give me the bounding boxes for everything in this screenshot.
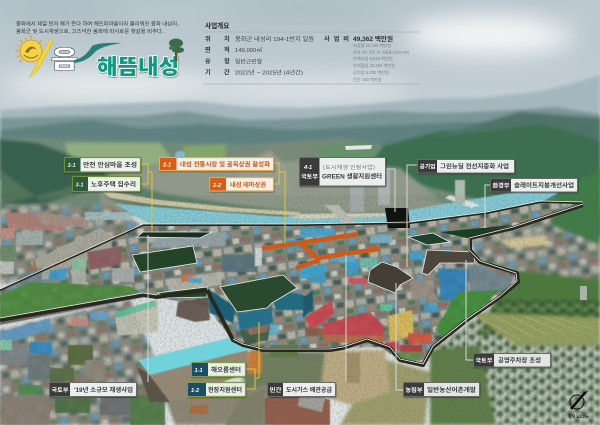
farmland rows xyxy=(480,316,595,340)
callout: 4-1 green centre: GREEN 생활지원센터 xyxy=(322,172,382,180)
callout: gas supply: 도시가스 배관공급 xyxy=(286,386,332,394)
callout: 2-1 market xyxy=(160,158,274,170)
icon: north arrow and scale xyxy=(568,391,590,419)
callout: 4-1 green centre: (도시재생 인정사업) xyxy=(323,164,375,171)
project area details: forest plots and dark buildings xyxy=(132,208,513,312)
project overview table: 위 xyxy=(205,35,211,43)
callout: 4-1 green centre xyxy=(300,158,386,186)
project overview table: 기 xyxy=(205,68,211,76)
project overview table: 사 업 비 xyxy=(324,35,349,43)
icon: teal swoosh xyxy=(74,43,122,63)
callout: 2-1 market: 2-1 xyxy=(162,162,171,168)
callout: gas supply xyxy=(268,382,336,396)
callout: slate removal: 슬레이트지붕개선사업 xyxy=(514,182,574,190)
project overview table: 간 xyxy=(224,68,230,76)
callout: 1-2 centre xyxy=(188,382,246,396)
callout: 3-1 safe village: 3-1 xyxy=(68,163,76,169)
intro text: 봉화에서 제일 먼저 해가 뜬다 하여 해뜨피마을이라 불리워진 봉화 내성리.. xyxy=(16,20,180,28)
callout: 3-1 safe village xyxy=(64,158,140,172)
logo xyxy=(15,35,184,79)
intro text xyxy=(16,20,180,35)
callout: slate removal xyxy=(490,178,578,192)
callout: 1-2 centre: 현장지원센터 xyxy=(208,386,242,394)
callout: 1-1 centre: 1-1 xyxy=(194,368,203,374)
callout: 3-1 housing repair: 3-1 xyxy=(76,182,84,188)
logo wordmark: 음: 음 xyxy=(51,46,78,74)
town belt beyond river xyxy=(0,150,600,285)
right town and hills xyxy=(0,170,600,425)
project overview table: 봉화군 내성리 194-1번지 일원 xyxy=(235,35,314,43)
intro text: 봉화군 및 도시재생으로, 고즈넉한 봉화에 따사로운 햇살을 비추다.. xyxy=(16,27,165,35)
logo wordmark: 해뜸내성: 해뜸내성 xyxy=(97,56,179,79)
callout: 1-1 centre: 해오름센터 xyxy=(211,366,241,374)
callout: KEPCO undergrounding xyxy=(418,160,514,173)
project overview table: 49,362 백만원 xyxy=(353,34,393,43)
callout: 2-2 theme xyxy=(210,178,274,191)
callout: 1-2 centre: 1-2 xyxy=(191,388,200,394)
callouts xyxy=(50,158,578,396)
project overview table: 연계사업 6,515 백만원 xyxy=(353,55,393,62)
callout: public parking: 국토부 xyxy=(476,358,492,364)
project overview table: 마중물 14,160 백만원 xyxy=(353,42,391,49)
callout: rural development: 농림부 xyxy=(406,386,422,394)
leader lines xyxy=(141,163,490,390)
heading: 사업개요 xyxy=(205,21,229,30)
project overview table: 면 xyxy=(205,46,211,54)
icon: sun xyxy=(15,35,53,78)
project overview table: 적 xyxy=(224,46,230,54)
callout: 2-2 theme: 2-2 xyxy=(212,183,222,189)
photo grain xyxy=(0,195,600,425)
callout: KEPCO undergrounding: 공기업 xyxy=(420,162,436,170)
project overview table xyxy=(203,21,420,84)
callout: public parking: 공영주차장 조성 xyxy=(498,356,541,364)
project overview table: 149,000㎡ xyxy=(235,46,262,54)
large landmark buildings xyxy=(137,288,313,402)
callout: 3-1 housing repair: 노후주택 집수리 xyxy=(91,180,136,188)
project overview table: 유 xyxy=(205,58,211,66)
callout: small regeneration: 국토부 xyxy=(52,387,68,394)
callout: 4-1 green centre: 국토부 xyxy=(301,174,318,180)
icon: pine tree xyxy=(169,38,184,61)
callout: 2-2 theme: 내성 테마상권 xyxy=(230,181,266,189)
river xyxy=(100,162,560,226)
callout: rural development xyxy=(404,382,480,396)
project overview table: 일반근린형 xyxy=(235,58,262,66)
callout: small regeneration: '19년 소규모 재생사업 xyxy=(74,386,133,394)
project overview table: 치 xyxy=(224,35,230,43)
callout: public parking xyxy=(474,354,550,367)
callout: slate removal: 환경부 xyxy=(492,182,510,190)
callout: rural development: 일반농산어촌개발 xyxy=(427,386,477,394)
inside district base xyxy=(0,202,583,365)
callout: 2-1 market: 내성 전통시장 및 골목상권 활성화 xyxy=(180,160,271,168)
project overview table: 공기업 6,200 백만원 xyxy=(353,69,389,76)
project overview table: 2022년 ~ 2025년 (4년간) xyxy=(235,68,303,76)
callout: 4-1 green centre: 4-1 xyxy=(303,165,312,171)
callout: 1-1 centre xyxy=(192,362,246,376)
callout: gas supply: 민간 xyxy=(270,386,282,394)
callout: 3-1 housing repair xyxy=(72,176,140,192)
project overview table: 민간 193 백만원 xyxy=(353,76,382,83)
icon: north arrow and scale: 축척 1/2,700 xyxy=(568,413,590,419)
project overview table: 부처협업 22,294 백만원 xyxy=(353,62,395,69)
orange market street highlight xyxy=(262,234,379,268)
callout: KEPCO undergrounding: 그린뉴딜 전선지중화 사업 xyxy=(440,162,509,170)
callout: 3-1 safe village: 안전 안심마을 조성 xyxy=(83,161,137,169)
buildings and roofs xyxy=(0,212,514,425)
project overview table: (지방 100, 민간 34, 마중물사업비 400) xyxy=(353,50,409,54)
project overview table: 형 xyxy=(224,58,230,66)
boundary road xyxy=(0,201,583,365)
callout: small regeneration xyxy=(50,382,136,396)
